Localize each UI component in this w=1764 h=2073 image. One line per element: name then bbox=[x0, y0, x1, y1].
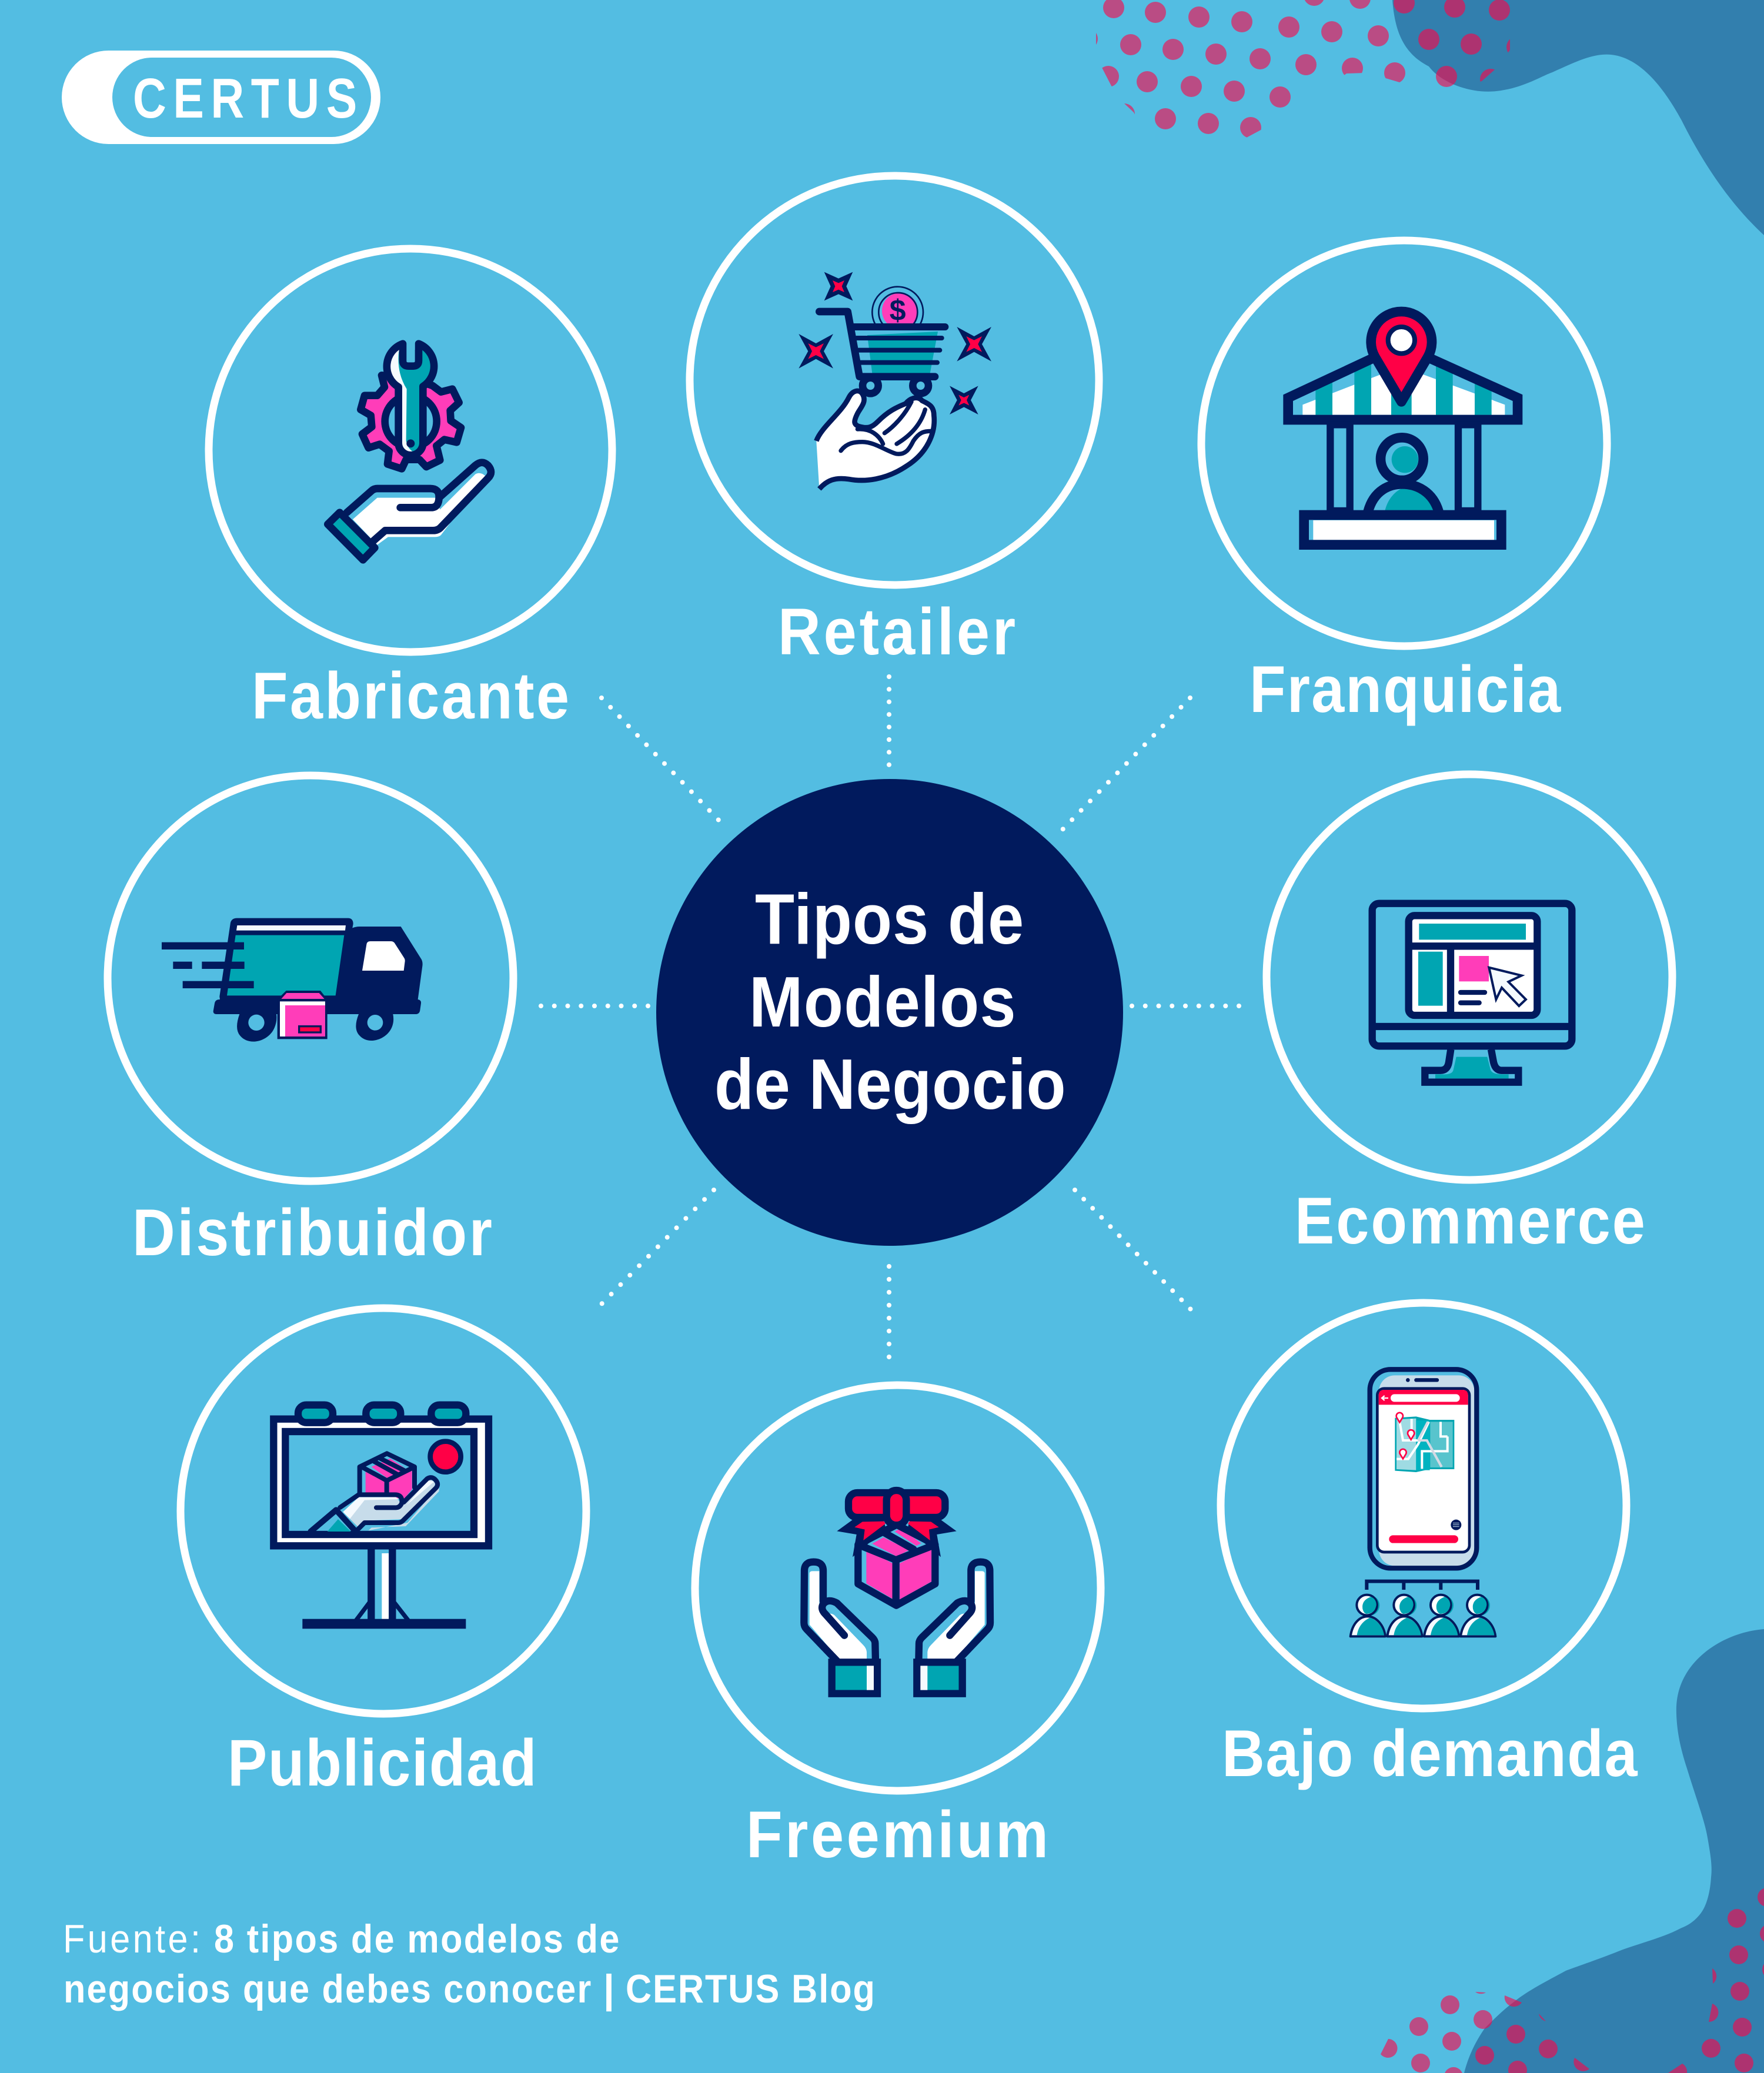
hub title: Tipos de bbox=[755, 879, 1024, 959]
connector: left bbox=[541, 1004, 649, 1008]
source footnote: negocios que debes conocer bbox=[64, 1966, 591, 2011]
connector: top left bbox=[602, 698, 723, 824]
label: Distribuidor: Distribuidor bbox=[132, 1196, 492, 1269]
panel: Franquicia bbox=[1201, 240, 1607, 726]
connector: bottom right bbox=[1075, 1190, 1191, 1309]
hub title: de Negocio bbox=[714, 1044, 1066, 1124]
panel: Ecommerce bbox=[1267, 774, 1672, 1258]
icon: kiosk with location pin bbox=[1288, 312, 1518, 545]
panel: Distribuidor bbox=[108, 775, 513, 1269]
icon: shopping cart on a hand bbox=[799, 272, 991, 489]
label: Freemium: Freemium bbox=[746, 1798, 1048, 1871]
decorative dots: bottom right bbox=[1381, 1888, 1764, 2073]
connector: top right bbox=[1063, 698, 1190, 830]
source footnote: 8 tipos de modelos de bbox=[214, 1916, 619, 1961]
logo: CERTUS bbox=[62, 51, 380, 144]
decorative dots: top right bbox=[1077, 0, 1528, 138]
icon: gear, wrench and hand bbox=[328, 338, 491, 560]
source footnote: Fuente: bbox=[63, 1916, 201, 1961]
icon: phone with map and users bbox=[1351, 1369, 1495, 1636]
connector: bottom left bbox=[602, 1190, 714, 1304]
connector: right bbox=[1132, 1004, 1240, 1008]
source footnote bbox=[63, 1916, 875, 2012]
hub title: Modelos bbox=[749, 962, 1016, 1042]
hub title bbox=[714, 879, 1066, 1124]
source footnote: | bbox=[603, 1967, 614, 2012]
connector: bottom bbox=[887, 1266, 891, 1358]
icon: billboard bbox=[273, 1405, 489, 1629]
source footnote: CERTUS Blog bbox=[626, 1966, 875, 2011]
label: Ecommerce: Ecommerce bbox=[1295, 1184, 1645, 1258]
panel: Retailer bbox=[690, 176, 1099, 668]
icon: shopping cart on a hand: $ bbox=[890, 294, 906, 327]
label: Fabricante: Fabricante bbox=[252, 659, 569, 733]
icon: delivery truck bbox=[162, 918, 423, 1042]
decorative blob: bottom right bbox=[1464, 1629, 1764, 2073]
icon: desktop monitor with web page bbox=[1372, 904, 1572, 1082]
connector: top bbox=[887, 677, 891, 765]
label: Franquicia: Franquicia bbox=[1250, 653, 1561, 726]
label: Bajo demanda: Bajo demanda bbox=[1222, 1717, 1638, 1790]
label: Publicidad: Publicidad bbox=[228, 1726, 537, 1800]
icon: gift box and two hands bbox=[804, 1490, 990, 1694]
decorative blob: top right bbox=[1392, 0, 1764, 235]
logo: CERTUS: CERTUS bbox=[133, 67, 357, 130]
panel: Bajo demanda bbox=[1221, 1303, 1638, 1790]
panel: Publicidad bbox=[181, 1308, 586, 1800]
panel: Freemium bbox=[695, 1385, 1101, 1871]
label: Retailer: Retailer bbox=[778, 595, 1015, 668]
central hub bbox=[656, 779, 1123, 1246]
panel: Fabricante bbox=[209, 249, 612, 733]
